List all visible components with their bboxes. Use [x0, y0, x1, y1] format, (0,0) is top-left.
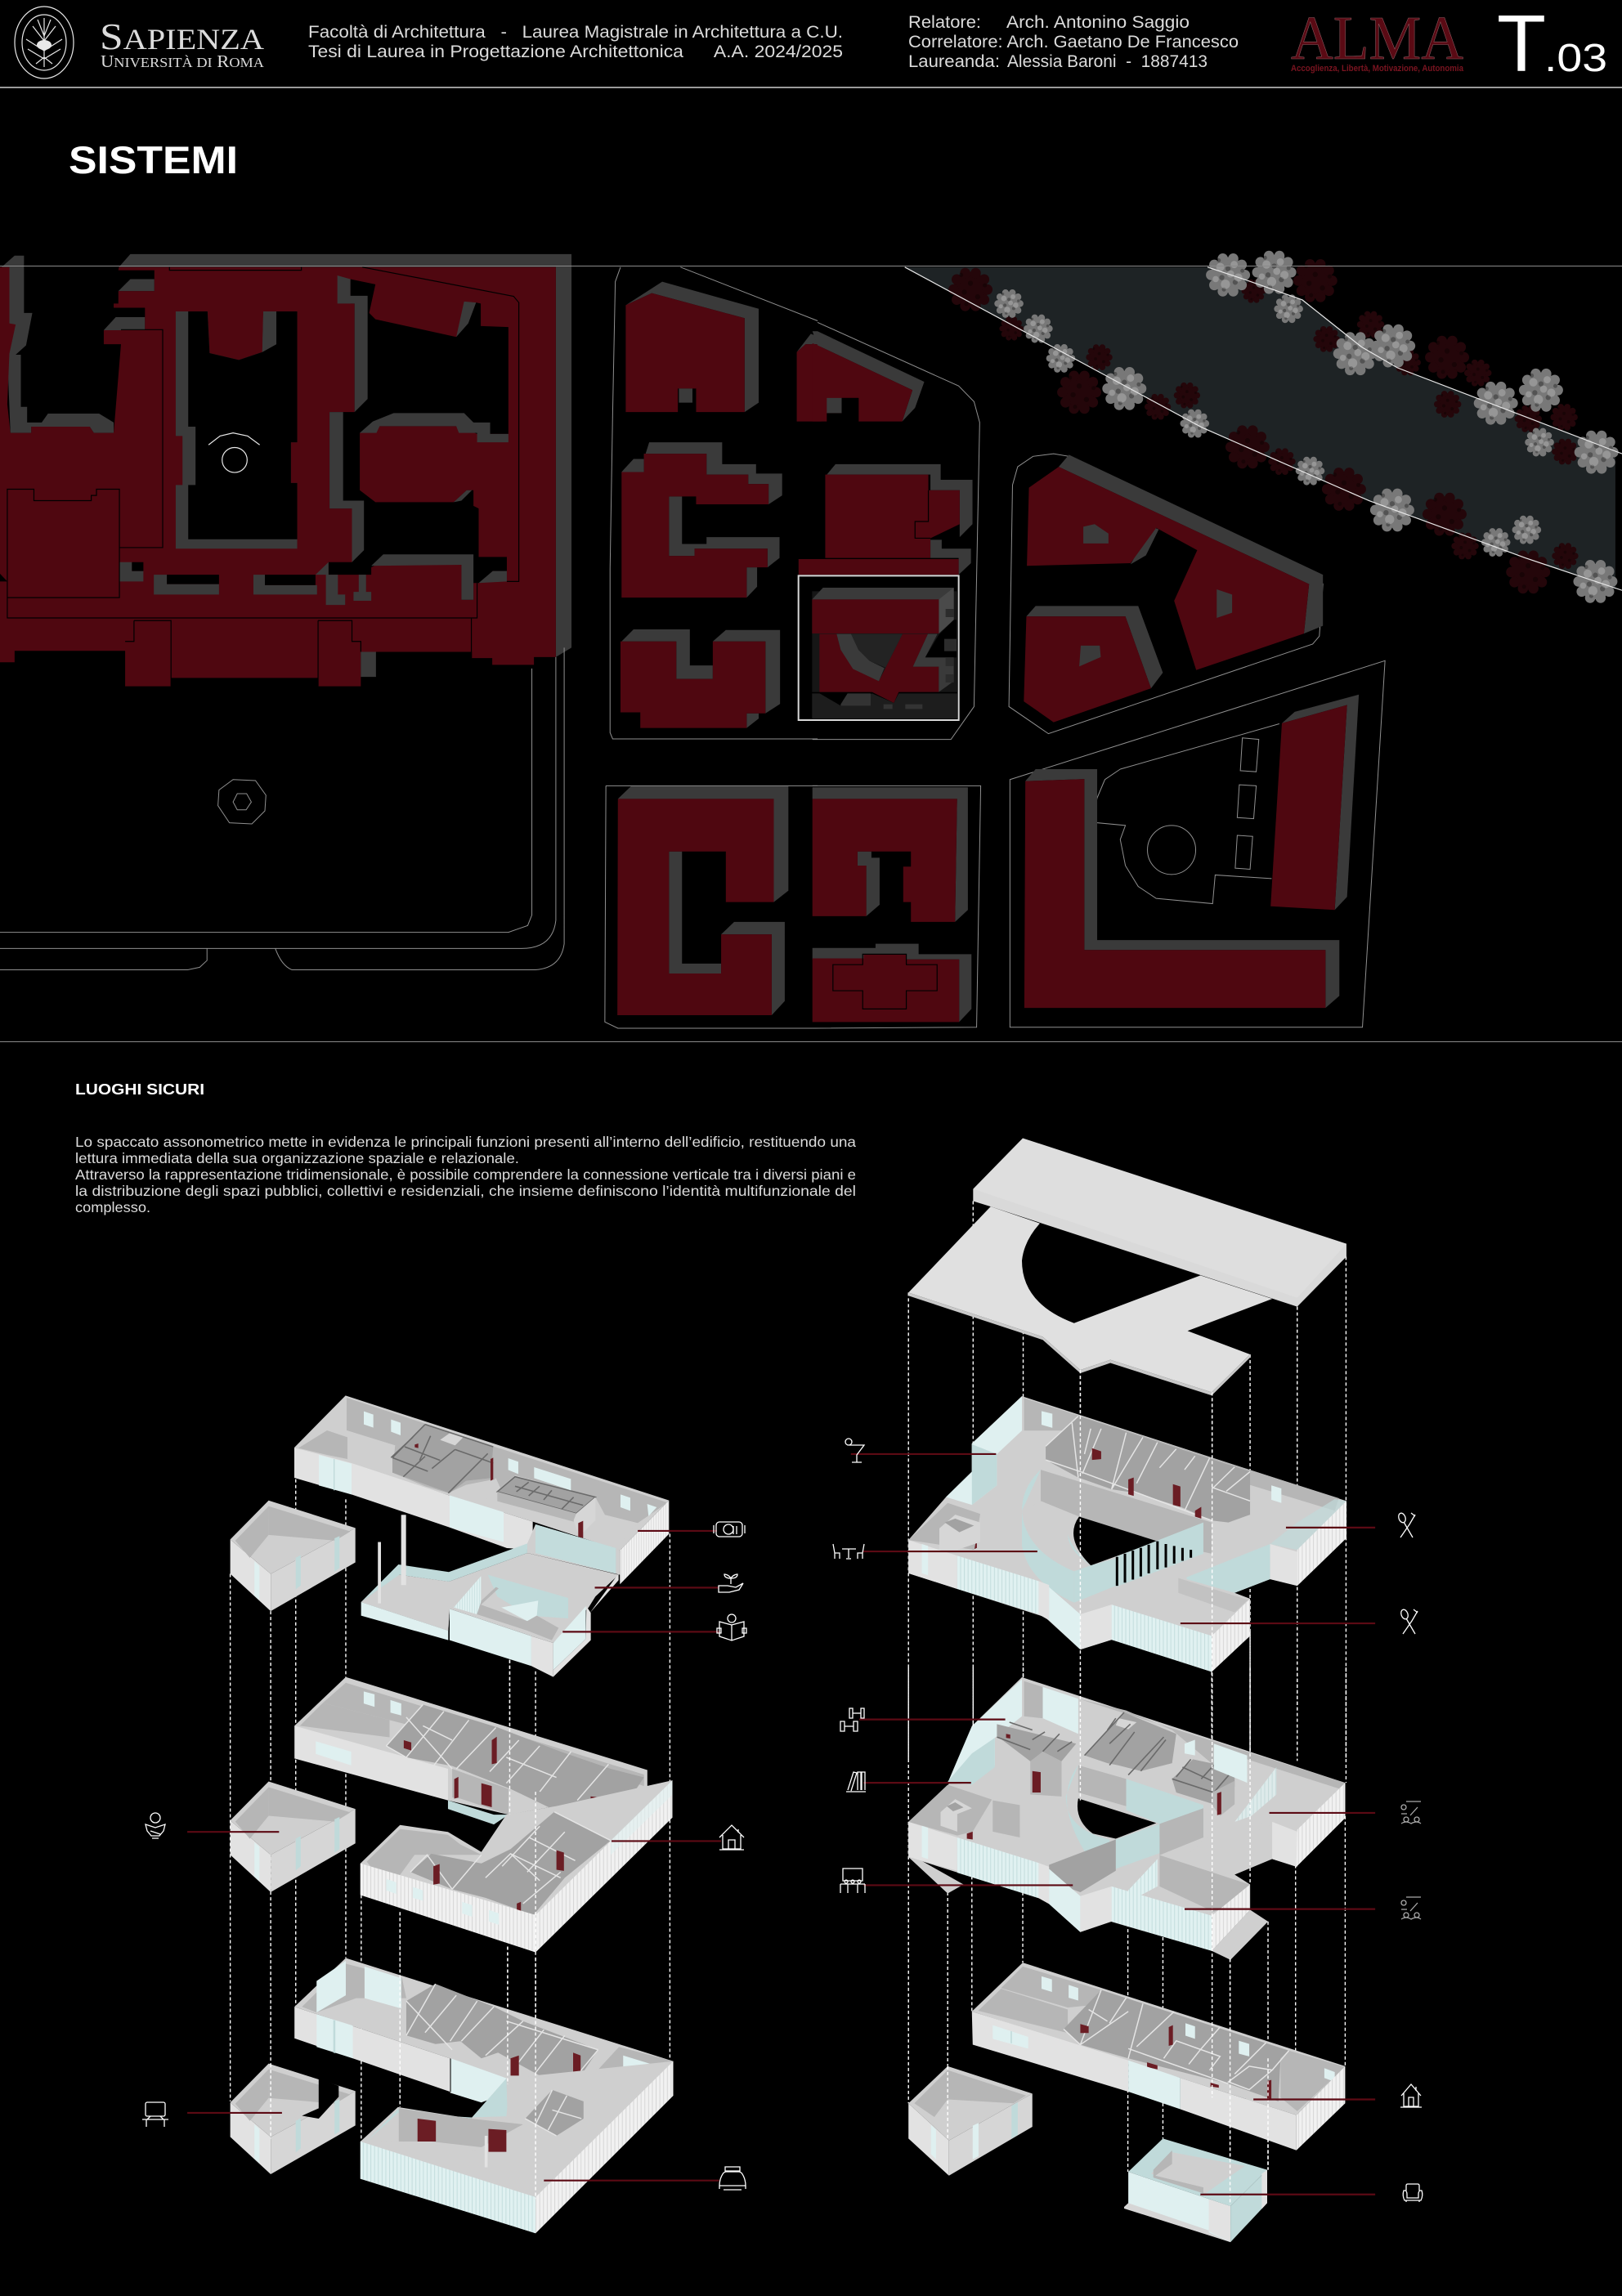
site plan	[0, 251, 1622, 1028]
icon: hand with plant	[719, 1574, 743, 1592]
park with trees	[905, 251, 1622, 603]
right axonometric exploded view, upper part	[851, 1138, 1375, 1761]
left icons	[142, 1522, 746, 2190]
gym and classroom floor	[908, 1677, 1345, 1960]
icon: bed	[719, 2167, 746, 2190]
dashed lines over floors	[908, 1667, 1346, 2205]
supervisors and student: Alessia Baroni - 1887413	[1007, 52, 1208, 71]
logo: ALMA: Accoglienza, Libertà, Motivazione, Autonomia	[1291, 64, 1464, 74]
icon: cutlery first	[1397, 1512, 1415, 1537]
icon: table and chairs	[833, 1544, 864, 1559]
callout lines	[187, 1531, 721, 2181]
icon: house right	[1400, 2084, 1422, 2107]
icon: dumbbell	[840, 1708, 864, 1731]
lower wing	[361, 1515, 620, 1677]
icon: plate and cutlery	[714, 1522, 745, 1537]
upper wing	[294, 1395, 669, 1584]
supervisors and student	[908, 13, 1239, 71]
middle floor: upper wing	[294, 1677, 647, 1826]
table number: .03	[1544, 37, 1607, 80]
top floor, left axonometric	[294, 1395, 669, 1677]
supervisors and student: Arch. Antonino Saggio	[1006, 13, 1190, 32]
course information: Facoltà di Architettura - Laurea Magistrale in Architettura a C.U.	[308, 23, 843, 42]
course information: Tesi di Laurea in Progettazione Architettonica A.A. 2024/2025	[308, 43, 843, 61]
left axonometric: lower floors	[187, 1531, 721, 2233]
selected plot highlight	[799, 575, 959, 720]
icon: person reading book	[717, 1614, 746, 1640]
small block middle	[231, 1781, 356, 1892]
roof slab	[908, 1138, 1346, 1395]
right icons	[833, 1439, 1423, 2202]
icon: bust statue	[146, 1813, 165, 1838]
description text: lettura immediata della sua organizzazione spaziale e relazionale.	[75, 1150, 519, 1166]
callout lines	[851, 1454, 1375, 1623]
projection dashed lines	[908, 1201, 1346, 1761]
description text: complesso.	[75, 1199, 150, 1215]
left axonometric: dashed lines and small blocks	[231, 1479, 670, 2199]
supervisors and student: Relatore:	[908, 13, 981, 32]
table number	[1497, 0, 1607, 88]
central and east blocks	[799, 322, 1385, 1028]
left block: university building	[0, 254, 818, 1028]
bottom floor: upper wing	[294, 1958, 673, 2142]
icon: cocktail	[845, 1439, 864, 1462]
dashed lines over floor	[1080, 1370, 1250, 1761]
central blocks west part	[617, 282, 822, 1015]
section heading: LUOGHI SICURI	[75, 1081, 204, 1098]
callout lines	[859, 1720, 1375, 2195]
basement block	[1124, 2138, 1267, 2242]
front dashed lines over floors	[271, 1660, 535, 2199]
projection dashed lines	[908, 1816, 1345, 2205]
small block	[908, 2066, 1033, 2176]
stair glass wall, left axonometric	[535, 1524, 616, 1573]
small block lower	[231, 2064, 356, 2174]
long residential floor	[972, 1963, 1345, 2151]
logo: ALMA: ALMA	[1291, 4, 1463, 73]
middle floor: lower wing	[361, 1780, 672, 1953]
logo text: Sapienza Università di Roma: UNIVERSITÀ DI ROMA	[101, 51, 265, 71]
east blocks	[813, 454, 1359, 1022]
small block upper	[231, 1501, 356, 1611]
icon: television	[142, 2102, 168, 2127]
restaurant floor	[908, 1396, 1346, 1672]
logo text: Sapienza Università di Roma: SAPIENZA	[100, 16, 264, 57]
title: SISTEMI	[69, 138, 238, 181]
icon: cutlery second	[1400, 1609, 1418, 1634]
description text	[75, 1134, 856, 1215]
description text: la distribuzione degli spazi pubblici, collettivi e residenziali, che insieme definiscono l’identità multifunzionale del	[75, 1183, 856, 1199]
supervisors and student: Laureanda:	[908, 52, 1000, 71]
icon: armchair	[1403, 2184, 1423, 2202]
table number: T	[1497, 0, 1546, 88]
icon: house	[719, 1825, 744, 1850]
icon: group lesson second	[1401, 1897, 1421, 1919]
icon: group lesson first	[1401, 1801, 1421, 1824]
logo text: Sapienza Università di Roma	[100, 16, 265, 71]
right axonometric exploded view, lower part	[859, 1667, 1375, 2242]
logo: Sapienza seal	[15, 7, 74, 78]
icon: books	[846, 1772, 866, 1792]
course information	[308, 23, 843, 61]
header bar	[15, 0, 1607, 88]
supervisors and student: Correlatore: Arch. Gaetano De Francesco	[908, 33, 1239, 51]
description text: Attraverso la rappresentazione tridimensionale, è possibile comprendere la connessione verticale tra i diversi piani e	[75, 1166, 856, 1183]
projection dashed lines	[231, 1479, 670, 2199]
description text: Lo spaccato assonometrico mette in evidenza le principali funzioni presenti all’interno dell’edificio, restituendo una	[75, 1134, 856, 1150]
icon: classroom	[840, 1869, 865, 1893]
bottom floor: lower wing	[361, 2061, 673, 2233]
